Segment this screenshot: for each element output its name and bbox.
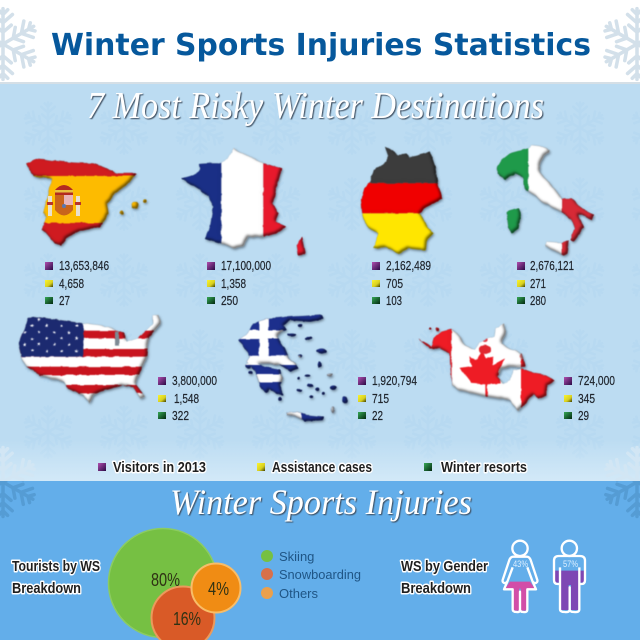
map: Greece bbox=[238, 314, 350, 424]
map: Italy bbox=[496, 144, 596, 258]
snowflake background pattern bbox=[0, 83, 640, 481]
bubble chart: 16% bbox=[173, 609, 201, 629]
map: USA bbox=[18, 314, 164, 406]
icon: Spain coat of arms bbox=[47, 185, 81, 216]
stats: Germany bbox=[372, 259, 431, 308]
legend: metrics: Visitors in 2013 bbox=[113, 459, 206, 476]
legend: metrics: Winter resorts bbox=[441, 459, 527, 476]
stats: Greece bbox=[358, 374, 417, 423]
legend: metrics: Assistance cases bbox=[272, 459, 372, 476]
label: tourists breakdown: Tourists by WS bbox=[12, 558, 100, 575]
stats: Canada: 29 bbox=[578, 409, 589, 423]
stats: Greece: 22 bbox=[372, 409, 383, 423]
bubble chart: 80% bbox=[151, 570, 180, 590]
legend: sports bbox=[261, 549, 361, 601]
stats: Greece: 715 bbox=[372, 392, 389, 406]
legend: sports: Others bbox=[279, 586, 319, 601]
header band bbox=[0, 0, 640, 84]
label: gender breakdown: Breakdown bbox=[401, 580, 471, 597]
stats: Spain: 4,658 bbox=[59, 277, 84, 291]
map: France bbox=[177, 143, 310, 260]
stats: Germany: 103 bbox=[386, 294, 402, 308]
heading: winter sports injuries: Winter Sports Injuries bbox=[170, 482, 472, 522]
stats: France: 250 bbox=[221, 294, 238, 308]
stats: Germany: 2,162,489 bbox=[386, 259, 431, 273]
icon: woman 43%: 43% bbox=[513, 559, 528, 570]
legend: sports: Skiing bbox=[279, 549, 314, 564]
stats: Canada: 345 bbox=[578, 392, 595, 406]
stats: USA: 3,800,000 bbox=[172, 374, 217, 388]
label: gender breakdown bbox=[401, 558, 488, 597]
icon: woman 43% bbox=[503, 541, 537, 612]
stats: Spain: 13,653,846 bbox=[59, 259, 109, 273]
stats: France bbox=[207, 259, 271, 308]
light strip above bottom panel bbox=[0, 440, 640, 481]
stats: USA bbox=[158, 374, 217, 423]
icon: snowflake lower left, lower part bbox=[0, 481, 36, 518]
icon: snowflake left bbox=[0, 9, 38, 79]
stats: Greece: 1,920,794 bbox=[372, 374, 417, 388]
stats: France: 17,100,000 bbox=[221, 259, 271, 273]
label: tourists breakdown: Breakdown bbox=[12, 580, 81, 597]
map: Germany bbox=[360, 146, 444, 257]
stats: Spain: 27 bbox=[59, 294, 70, 308]
icon: man 57% bbox=[554, 541, 585, 612]
stats: Canada: 724,000 bbox=[578, 374, 615, 388]
stats: France: 1,358 bbox=[221, 277, 246, 291]
stats: USA: 322 bbox=[172, 409, 189, 423]
stats: Italy bbox=[517, 259, 574, 308]
heading: 7 most risky: 7 Most Risky Winter Destinations bbox=[87, 85, 544, 127]
stats: Germany: 705 bbox=[386, 277, 403, 291]
stats: Italy: 2,676,121 bbox=[530, 259, 574, 273]
stats: USA: 1,548 bbox=[174, 392, 199, 406]
stats: Canada bbox=[564, 374, 615, 423]
stats: Italy: 280 bbox=[530, 294, 546, 308]
map: Spain bbox=[26, 158, 149, 248]
title: Winter Sports Injuries Statistics bbox=[51, 28, 591, 63]
stats: Spain bbox=[45, 259, 109, 308]
icon: man 57%: 57% bbox=[563, 559, 578, 570]
icon: snowflake lower left, upper part bbox=[0, 446, 34, 466]
bubble chart bbox=[108, 528, 240, 640]
map: Canada bbox=[418, 323, 556, 414]
icon: snowflake right bbox=[602, 9, 640, 79]
legend: metrics bbox=[98, 459, 527, 476]
icon: snowflake lower right, upper part bbox=[606, 446, 640, 466]
bubble chart: 4% bbox=[208, 579, 229, 599]
label: gender breakdown: WS by Gender bbox=[401, 558, 488, 575]
page background bbox=[0, 83, 640, 481]
label: tourists breakdown bbox=[12, 558, 100, 597]
icon: snowflake lower right, lower part bbox=[604, 481, 640, 518]
bottom panel bbox=[0, 481, 640, 640]
stats: Italy: 271 bbox=[530, 277, 546, 291]
legend: sports: Snowboarding bbox=[279, 567, 361, 582]
